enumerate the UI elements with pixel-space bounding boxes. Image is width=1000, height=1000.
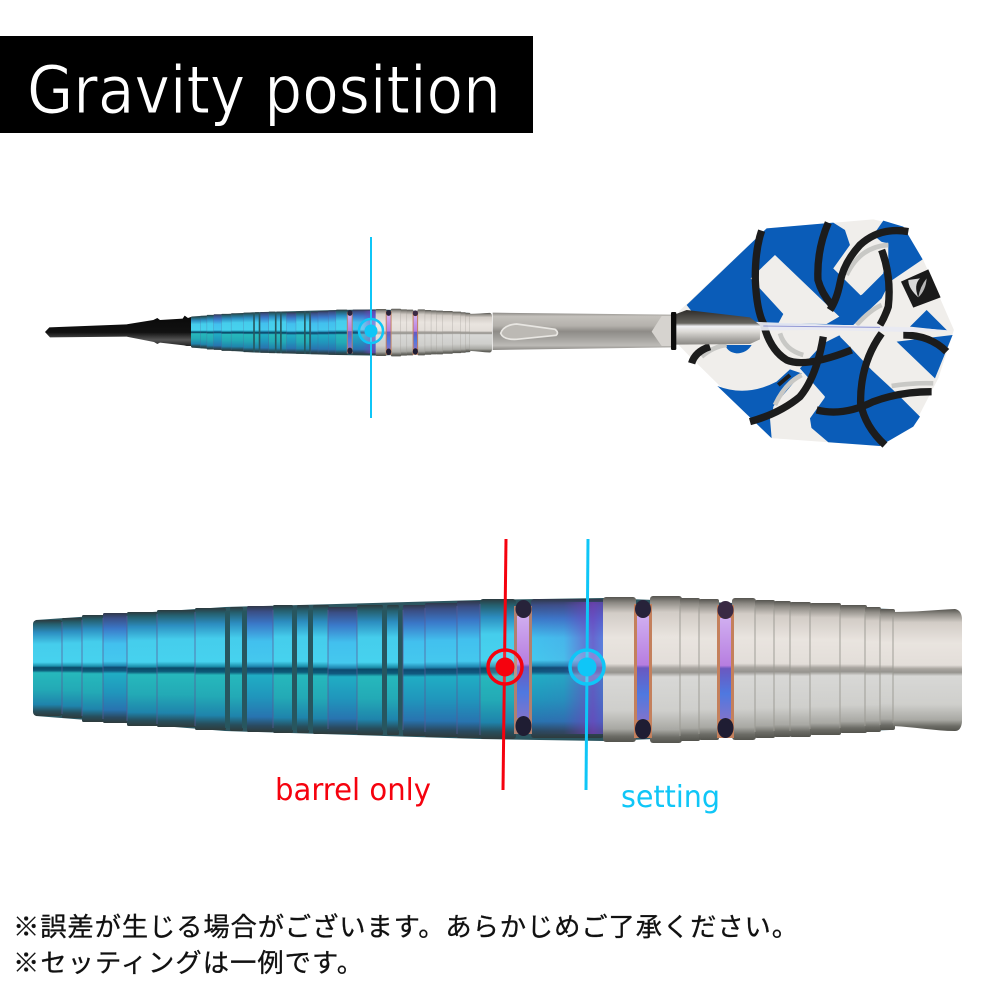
flight [671,219,954,446]
segment separators [62,604,480,735]
large barrel close-up [33,596,962,743]
label: barrel only: barrel only [275,773,431,808]
notes: ※セッティングは一例です。 [13,948,363,978]
notes: ※誤差が生じる場合がございます。あらかじめご了承ください。 [13,912,798,942]
silver barrel segments [603,596,962,743]
barrel backing silhouette [36,598,890,741]
gray shadows [702,245,933,405]
blue panels [687,221,953,446]
title text: Gravity position [27,52,501,129]
shaft [493,313,673,350]
black curves [692,223,947,445]
small barrel [191,309,492,356]
notes [13,912,798,978]
transparent centre stem [750,322,953,332]
ring grooves [514,600,734,739]
red gravity marker: barrel only [488,539,522,790]
complete dart [45,219,954,446]
flight logo [901,269,941,308]
flight base [679,219,954,446]
teal barrel segments [33,599,604,739]
black ring [671,312,676,350]
silver separators [680,604,893,736]
blue gravity marker on complete dart [359,237,383,418]
label: setting: setting [621,780,720,815]
clear shaft tip over flight [676,310,760,345]
blue gravity marker: setting [570,539,604,790]
dart tip [45,316,192,346]
title banner [0,36,533,133]
white shapes [751,240,935,440]
